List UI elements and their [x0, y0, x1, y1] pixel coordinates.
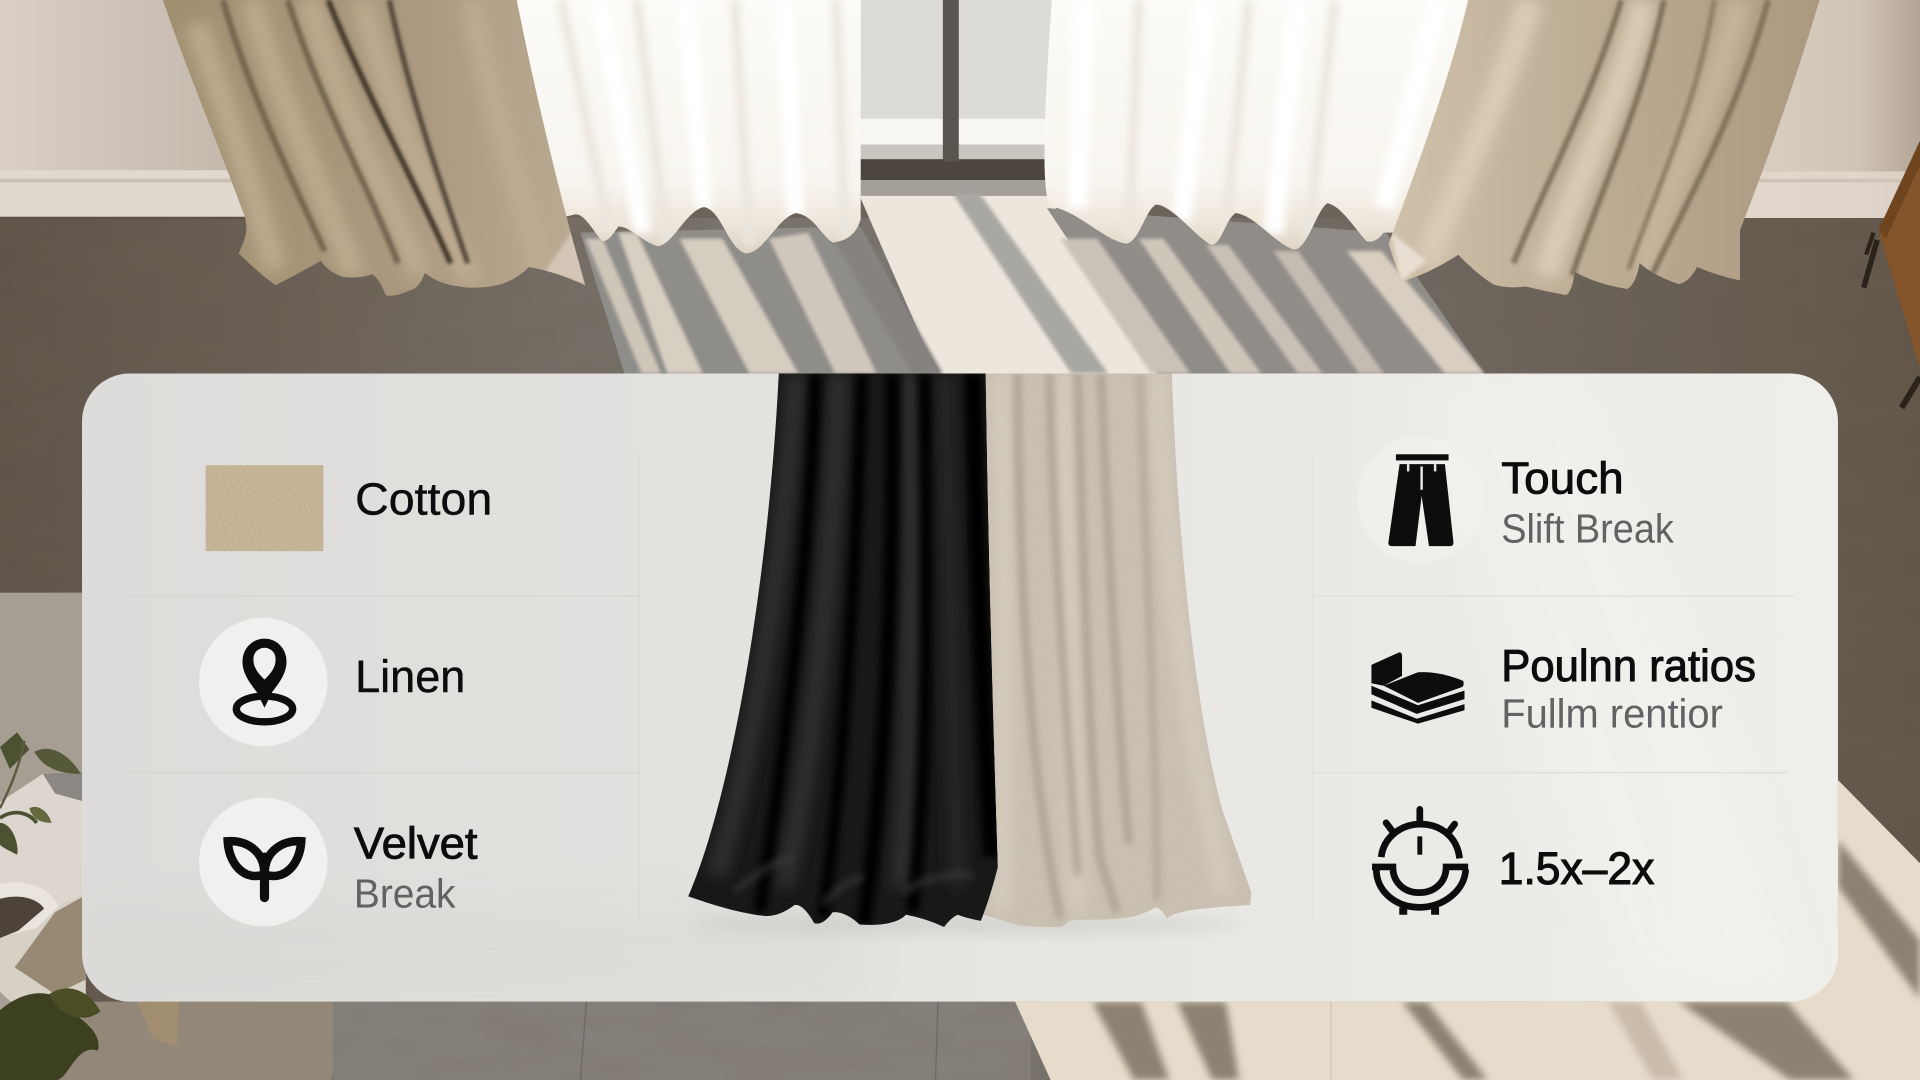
- main frosted panel: [82, 373, 1838, 1002]
- row: linen: [199, 618, 465, 746]
- label: Velvet Break: [354, 819, 478, 916]
- window: [845, 0, 1059, 197]
- label: Cotton: Cotton: [355, 473, 492, 524]
- right column: fit and proportions: [1357, 436, 1756, 915]
- icon: sprout: [199, 798, 328, 926]
- floor: [0, 218, 1920, 1080]
- heavy linen curtain left: [153, 0, 594, 306]
- label: Touch Slift Break: Slift Break: [1501, 505, 1675, 551]
- row: ratios: [1371, 642, 1756, 736]
- panel dividers: [122, 453, 1794, 924]
- plant: [0, 732, 100, 1080]
- label: 1.5x–2x: 1.5x–2x: [1499, 843, 1655, 894]
- left column: fabric types: [199, 465, 492, 926]
- black velvet curtain: [680, 367, 1004, 931]
- soft shadow under curtains: [692, 916, 1243, 933]
- panel soft light bands: [82, 373, 1812, 1002]
- window light stripes right: [1047, 208, 1484, 373]
- floor mottling: [0, 218, 1920, 1080]
- label: Touch Slift Break: Touch: [1501, 454, 1624, 503]
- sheer curtain left: [516, 0, 861, 254]
- row: fullness: [1372, 809, 1655, 915]
- sunlit floor centre: [860, 193, 1163, 373]
- right wall and baseboard: [1714, 0, 1920, 218]
- centre: curtain fabric samples: [680, 367, 1261, 933]
- sheer curtain right: [1044, 0, 1468, 250]
- row: touch: [1357, 436, 1675, 563]
- rug left and bottom: [0, 593, 349, 1080]
- label: Touch Slift Break: [1501, 454, 1675, 551]
- sun patch bottom right: [1015, 780, 1920, 1080]
- label: Velvet Break: Break: [354, 870, 456, 916]
- white chair and pot: [0, 771, 96, 1036]
- row: cotton: [206, 465, 492, 551]
- left wall and baseboard: [0, 0, 257, 219]
- icon: folded fabric stack: [1371, 652, 1464, 724]
- icon: location pin: [199, 618, 328, 746]
- label: Linen: Linen: [355, 651, 465, 702]
- icon: trousers: [1357, 436, 1484, 563]
- label: Poulnn ratios Fullm rentior: Fullm rentior: [1501, 690, 1723, 736]
- window light stripes left: [580, 227, 943, 373]
- icon: dial gauge: [1372, 809, 1468, 915]
- label: Poulnn ratios Fullm rentior: Poulnn ratios: [1501, 642, 1756, 691]
- heavy linen curtain right: [1384, 0, 1824, 306]
- row: velvet: [199, 798, 478, 926]
- wooden cabinet: [1864, 141, 1920, 408]
- label: Velvet Break: Velvet: [354, 819, 478, 868]
- beige linen curtain: [973, 367, 1261, 931]
- icon: cotton fabric swatch: [206, 465, 323, 551]
- label: Poulnn ratios Fullm rentior: [1501, 642, 1756, 736]
- wooden stand: [137, 1002, 179, 1047]
- bottom floor band and tile lines: [333, 1002, 1031, 1080]
